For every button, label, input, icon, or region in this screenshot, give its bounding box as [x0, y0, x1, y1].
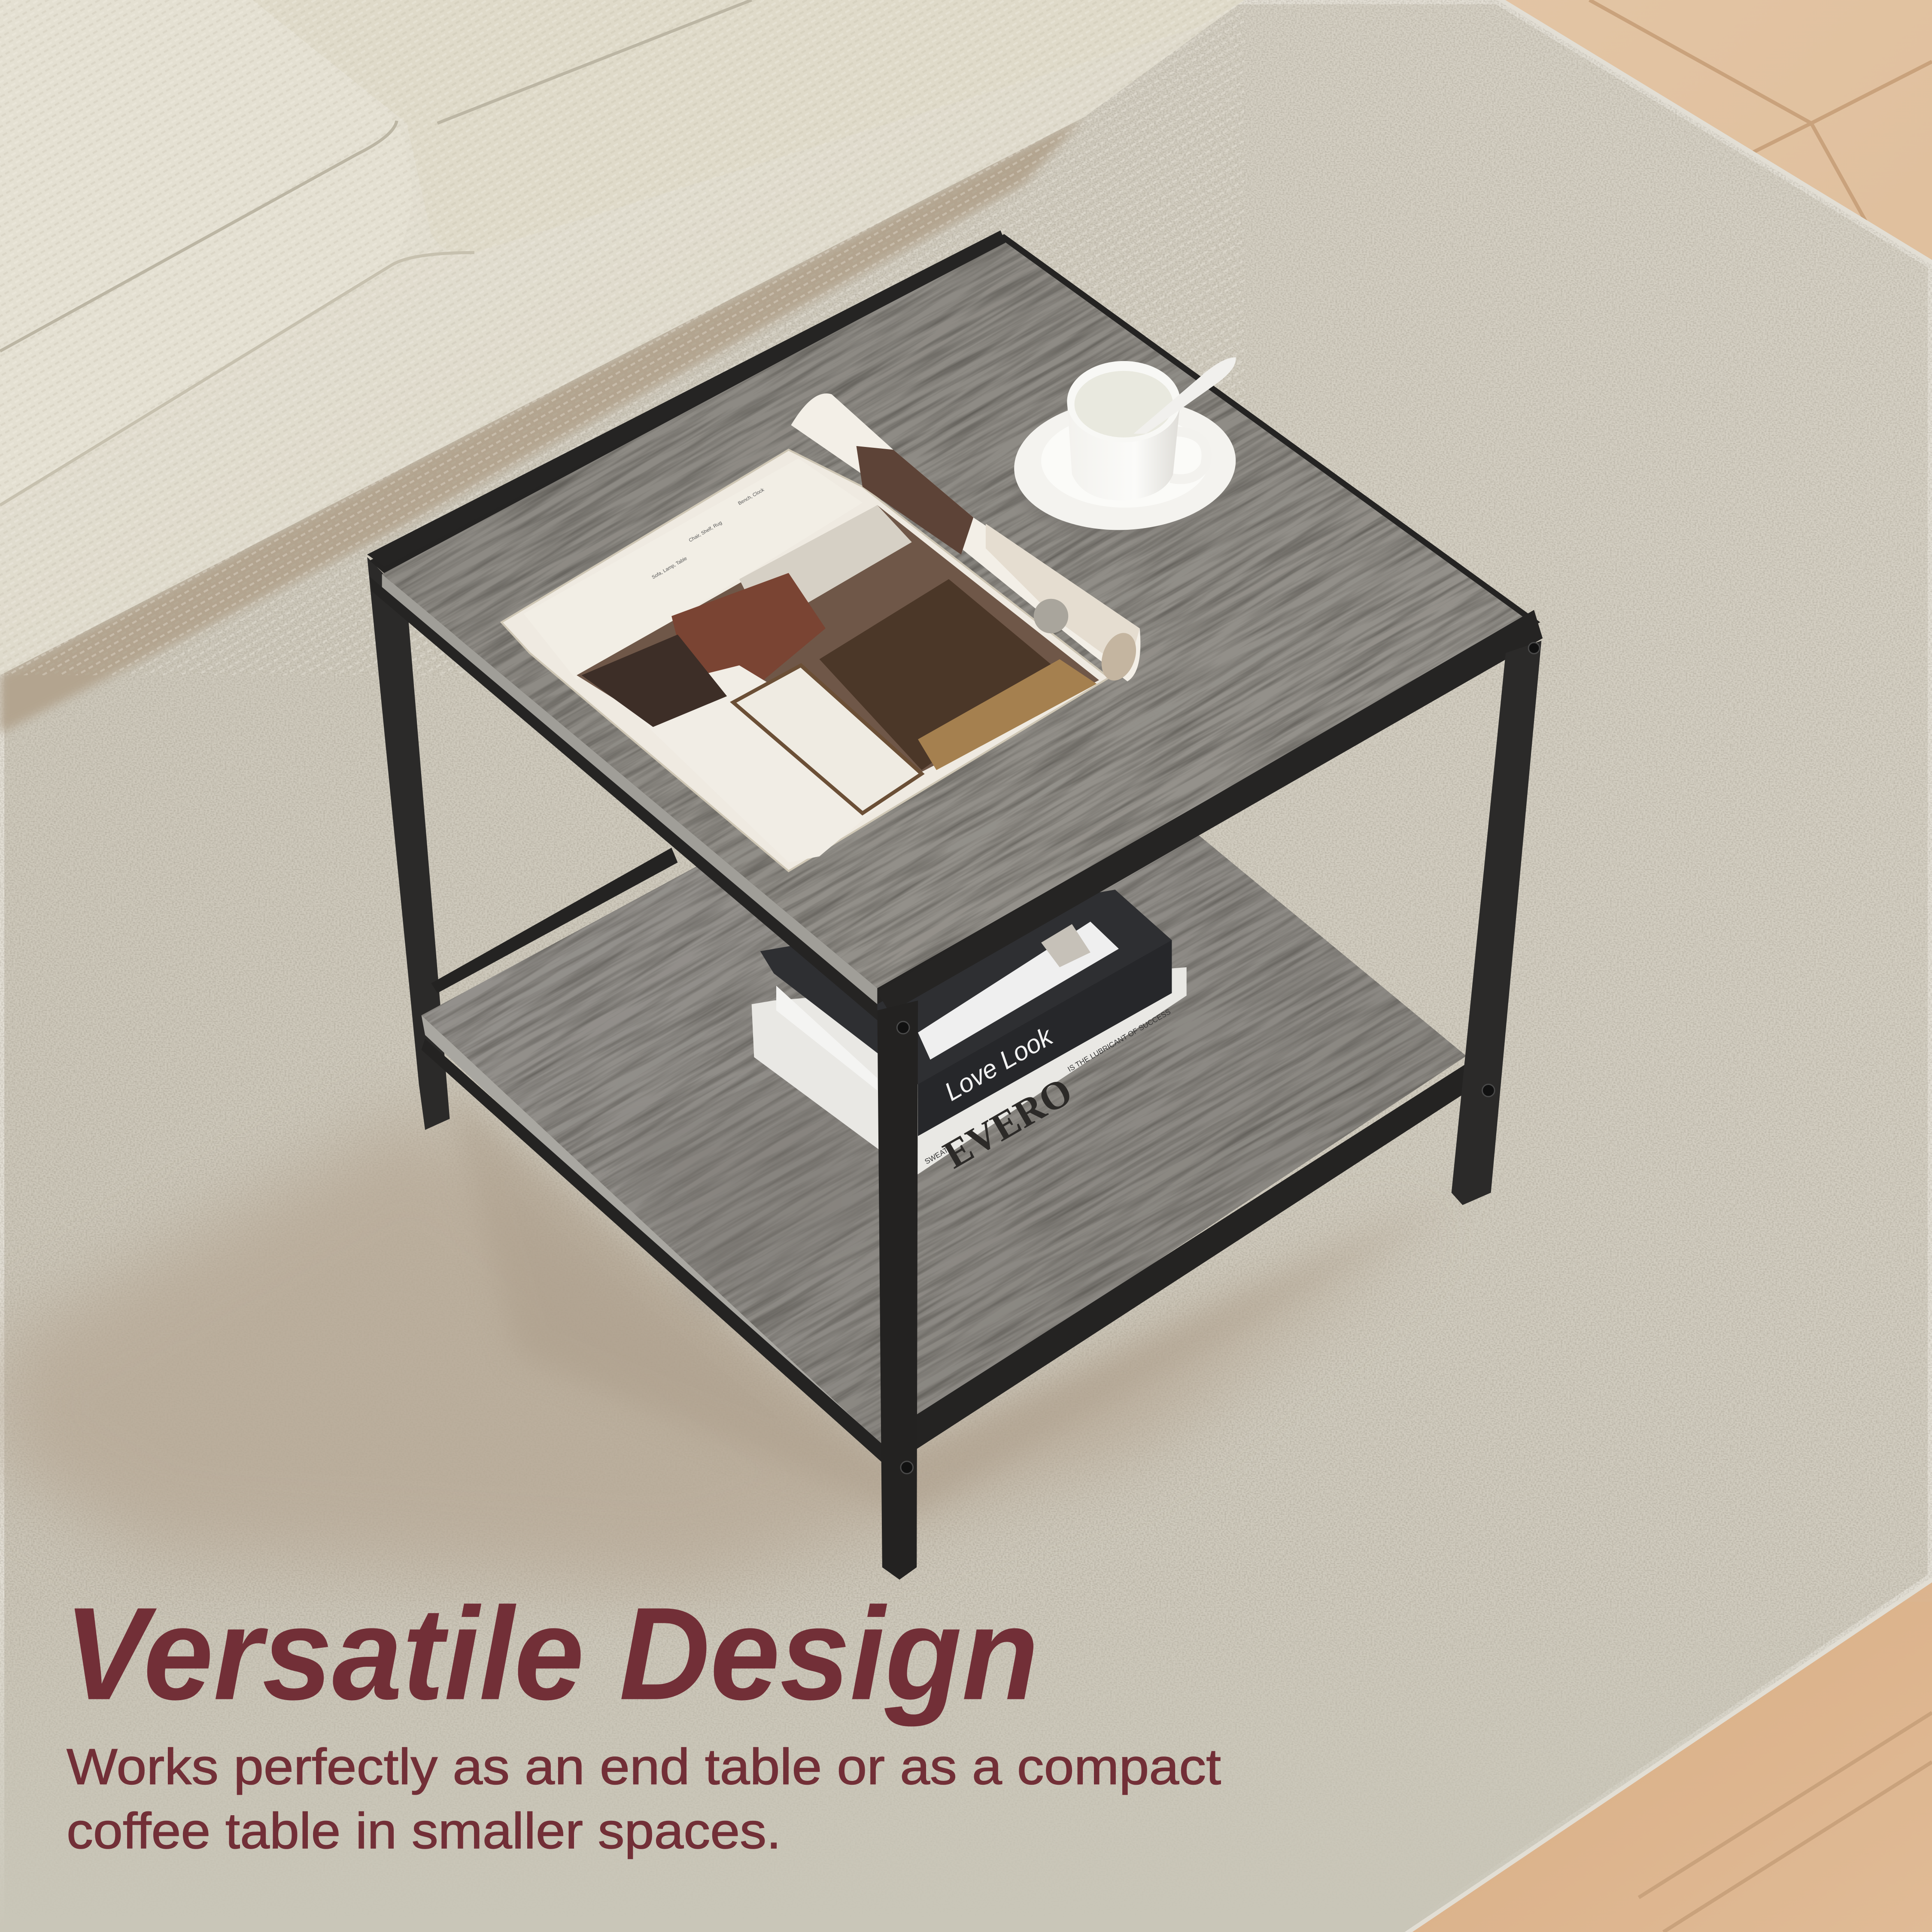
stacked books: IS THE LUBRICANT OF SUCCESS: [1066, 1007, 1172, 1073]
heading: Versatile Design: [64, 1580, 1039, 1728]
book cover photo: [918, 922, 1119, 1060]
cup handle: [1170, 431, 1206, 479]
frame bolts: [897, 643, 1540, 1473]
book titles: Love Look: [939, 1021, 1058, 1106]
rug area of photo: [739, 505, 912, 629]
magazine text: Bench, Clock: [737, 487, 765, 506]
cup rim: [1067, 361, 1180, 442]
interior photo: [577, 505, 1099, 774]
description text: [67, 1738, 1221, 1859]
rolled page: [791, 393, 1140, 681]
description line 2: coffee table in smaller spaces.: [67, 1802, 781, 1859]
black book: [760, 890, 1172, 1136]
top frame rails: [367, 231, 1543, 1020]
stacked books: EVERO: [936, 1069, 1079, 1177]
description line 1: Works perfectly as an end table or as a compact: [67, 1738, 1221, 1795]
magazine text: Sofa, Lamp, Table: [651, 556, 688, 580]
bottom white book: [752, 967, 1187, 1174]
stacked books: [752, 890, 1187, 1177]
sofa: [0, 0, 1245, 675]
saucer: [1011, 394, 1239, 535]
leather sofa: [671, 573, 826, 690]
bottom fade: [0, 1577, 1932, 1932]
cup body: [1067, 401, 1180, 501]
sofa shadow on rug: [0, 117, 1084, 733]
shelf rails: [422, 848, 1479, 1463]
right leg: [1452, 641, 1541, 1205]
upper cushion: [252, 0, 1245, 254]
coffee cup and saucer: [1011, 357, 1239, 536]
front leg: [877, 1000, 918, 1580]
seat cushion: [0, 0, 412, 505]
table shadow on rug: [0, 1084, 1466, 1589]
dark cabinet: [582, 635, 727, 727]
magazine text: [651, 487, 765, 580]
lower white wall: [616, 665, 918, 863]
bookcase: [819, 579, 1060, 770]
sofa base: [0, 0, 1245, 675]
magazine: [501, 393, 1142, 871]
back left leg: [367, 557, 450, 1130]
middle pages: [776, 986, 877, 1091]
spoon: [1133, 357, 1236, 434]
open page spread: [501, 450, 1109, 871]
stacked books: SWEAT: [923, 1145, 950, 1166]
white text band: [524, 459, 863, 680]
magazine text: Chair, Shelf, Rug: [688, 520, 723, 543]
